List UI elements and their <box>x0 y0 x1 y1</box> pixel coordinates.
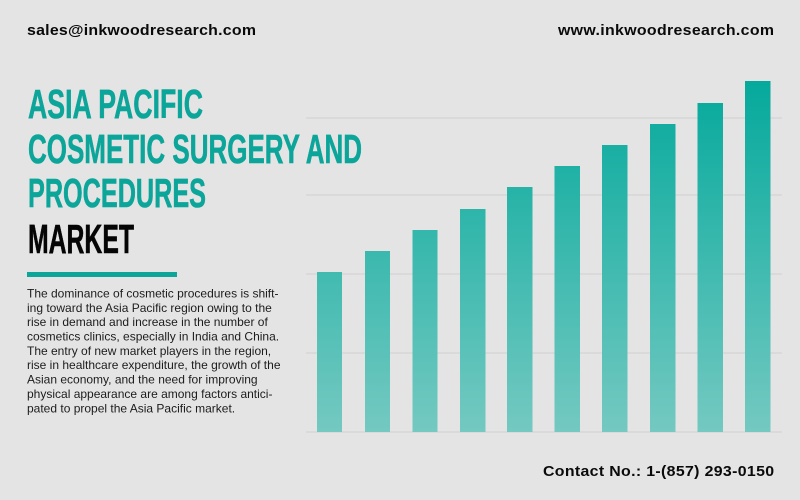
email: sales@inkwoodresearch.com <box>27 22 256 39</box>
description text: rise in demand and increase in the number of <box>27 315 268 329</box>
description text: ing toward the Asia Pacific region owing to the <box>27 301 272 315</box>
description text: The entry of new market players in the region, <box>27 344 271 358</box>
bar chart <box>306 81 782 432</box>
title <box>28 81 362 262</box>
description text <box>27 286 281 416</box>
title underline <box>27 272 177 277</box>
website: www.inkwoodresearch.com <box>557 22 774 39</box>
description text: cosmetics clinics, especially in India and China. <box>27 330 279 344</box>
title: MARKET <box>28 216 134 262</box>
title: ASIA PACIFIC <box>28 81 203 127</box>
description text: rise in healthcare expenditure, the growth of the <box>27 358 281 372</box>
title: PROCEDURES <box>28 170 206 216</box>
description text: The dominance of cosmetic procedures is shift- <box>27 286 278 300</box>
description text: pated to propel the Asia Pacific market. <box>27 402 235 416</box>
contact number: Contact No.: 1-(857) 293-0150 <box>543 463 774 480</box>
description text: Asian economy, and the need for improving <box>27 372 258 386</box>
description text: physical appearance are among factors antici- <box>27 387 272 401</box>
title: COSMETIC SURGERY AND <box>28 126 362 172</box>
